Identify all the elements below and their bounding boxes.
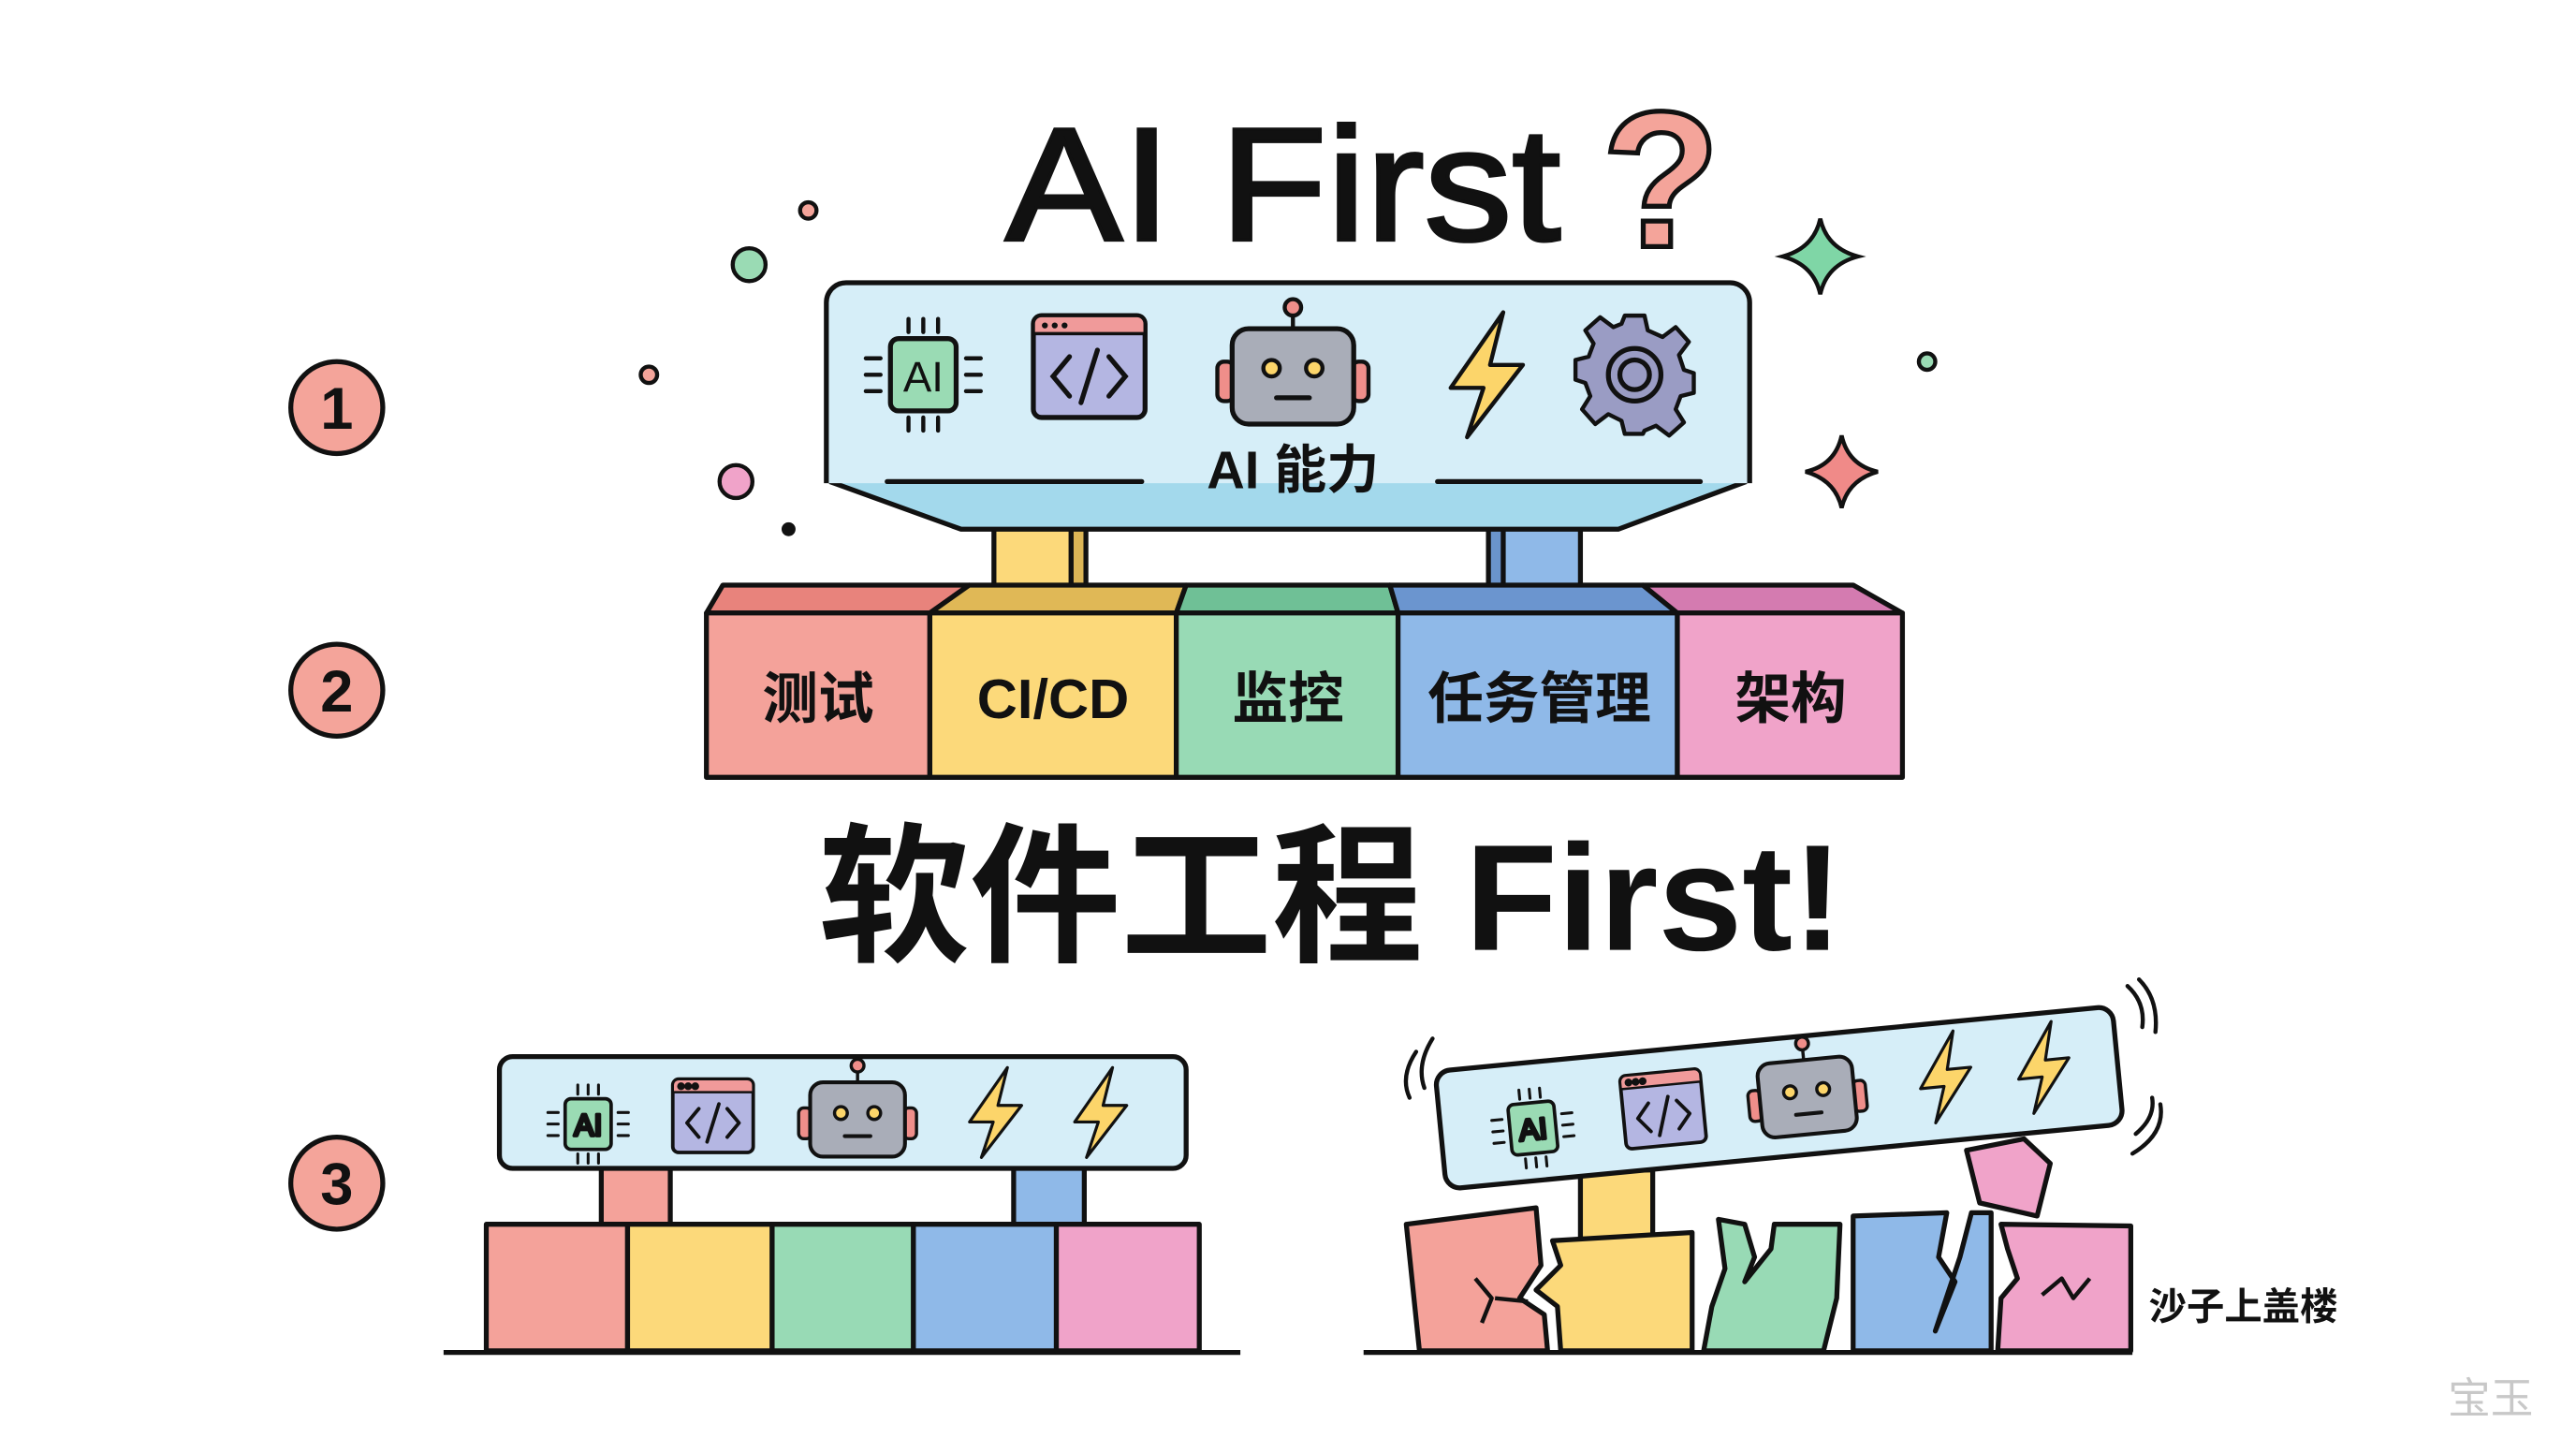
icon: code window [1033,315,1145,418]
icon: AI chip [866,319,981,431]
block labels: 测试 [762,668,874,730]
number badge 3 [291,1137,383,1229]
panel: small AI platform [500,1057,1186,1168]
block labels: 架构 [1734,668,1847,730]
icon: gear [1575,315,1694,435]
watermark: 宝玉 [2448,1375,2533,1423]
number badge 1: 1 [320,376,353,442]
scene: sand foundation collapsing [1364,979,2161,1353]
headline: 软件工程 First!: 软件工程 First! [818,814,1843,983]
number badge 3: 3 [320,1152,353,1218]
shake marks [1406,979,2161,1153]
number badge 2: 2 [320,659,353,725]
pillar: yellow connector [994,514,1086,607]
pillar: blue connector [1488,514,1580,607]
caption: 沙子上盖楼: 沙子上盖楼 [2149,1284,2337,1328]
title: AI First? [1005,71,1720,287]
title: AI First?: AI First [1005,95,1560,274]
number badge 2 [291,644,383,736]
blocks: engineering foundations [707,585,1902,777]
decorations: dots and sparkles [640,202,1936,535]
icon: robot [1218,300,1368,424]
panel: AI capabilities platform [827,283,1749,529]
panel: tilted AI platform [1435,1006,2123,1189]
icon: lightning [1451,313,1523,437]
broken blocks [1967,1138,2050,1216]
number badge 1 [291,361,383,454]
block labels [762,668,1847,730]
block labels: CI/CD [977,668,1129,730]
scene: solid foundation [444,1057,1240,1353]
label: AI 能力: AI 能力 [1207,440,1379,499]
block labels: 任务管理 [1427,668,1651,730]
title: AI First?: ? [1602,71,1720,287]
block labels: 监控 [1232,668,1344,730]
